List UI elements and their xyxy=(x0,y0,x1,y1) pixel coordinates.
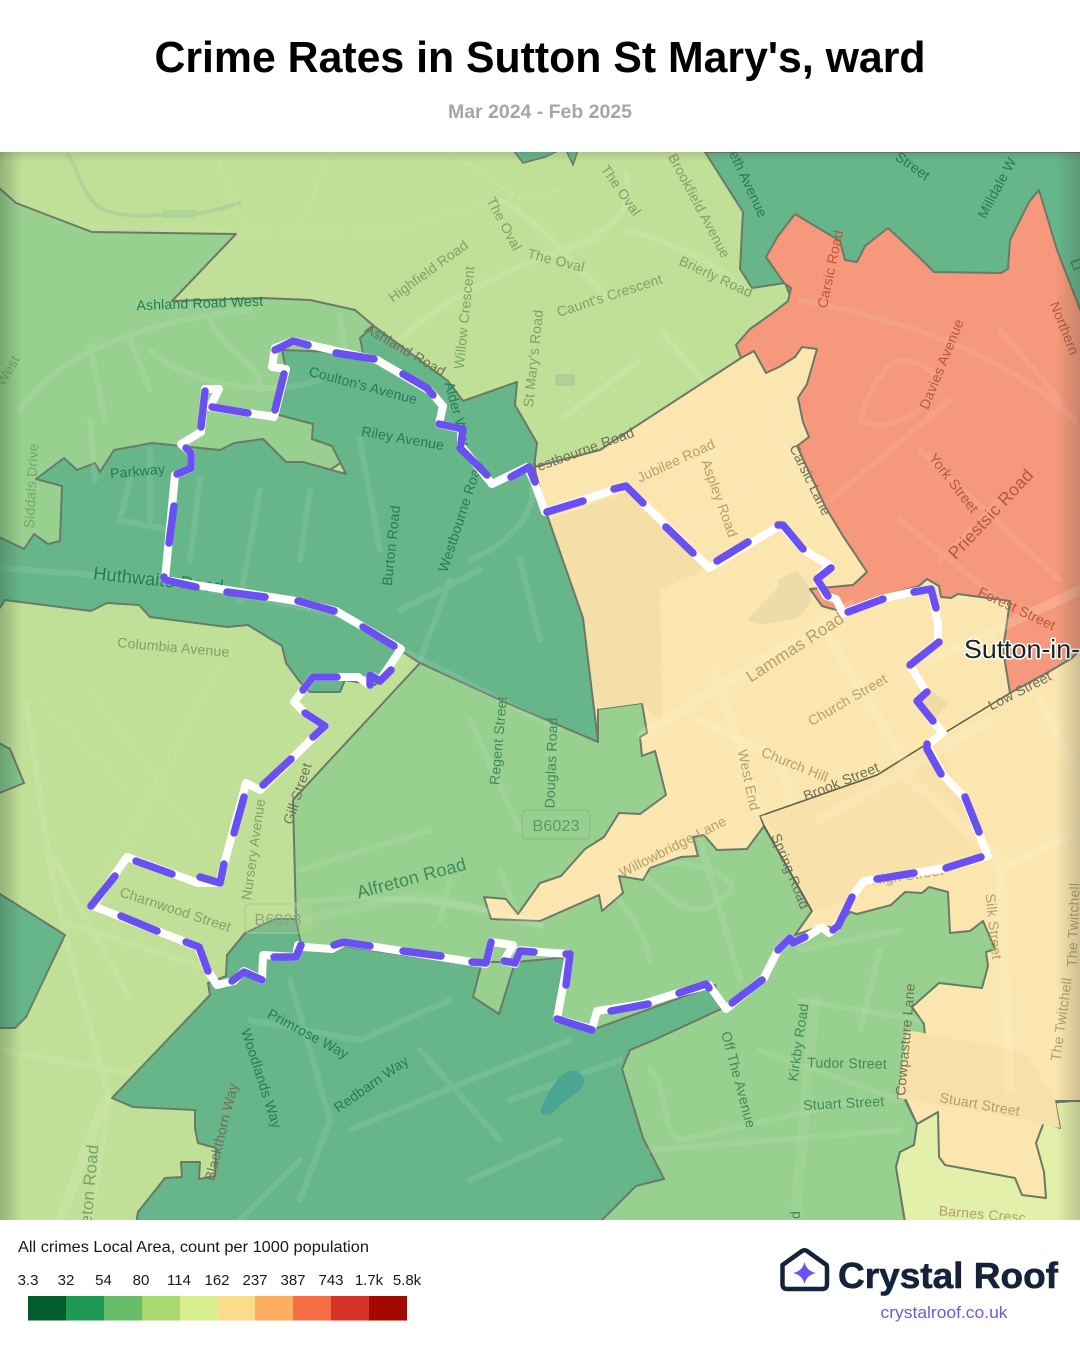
street labels: Burton Road xyxy=(379,504,403,586)
region: dark green top sliver xyxy=(513,150,578,165)
region: mid green central south xyxy=(293,663,1000,1222)
region: mid green west edge xyxy=(0,742,24,794)
legend heading: All crimes Local Area, count per 1000 population xyxy=(18,1239,369,1256)
street labels: Columbia Avenue xyxy=(117,634,230,660)
legend values: 3.3 xyxy=(18,1272,38,1289)
region: salmon high-crime area xyxy=(736,190,1080,693)
legend values: 387 xyxy=(280,1272,306,1289)
road shields xyxy=(245,810,590,933)
region: dark green north xyxy=(705,152,1080,320)
lake xyxy=(540,1071,584,1115)
legend values: 32 xyxy=(58,1272,74,1289)
street labels: Brookfield Avenue xyxy=(665,151,734,261)
street labels: Jubilee Road xyxy=(634,435,717,485)
region: mid green north-west xyxy=(0,186,375,560)
street labels: Woodlands Way xyxy=(238,1027,285,1130)
street labels: Caunt's Crescent xyxy=(555,271,664,320)
place label: Sutton-in-: Sutton-in- xyxy=(964,634,1080,664)
shield: B6023 west: B6023 xyxy=(254,912,302,929)
map edge shading xyxy=(0,152,1080,1220)
street labels: Alder Way xyxy=(442,380,474,448)
legend values: 80 xyxy=(133,1272,149,1289)
street labels: Carsic Lane xyxy=(786,442,835,518)
panel: choropleth map xyxy=(0,148,1080,1226)
street labels: Brook Street xyxy=(801,759,881,804)
street labels: eton Road xyxy=(77,1144,102,1225)
street labels: High Street xyxy=(870,862,944,888)
street labels: Lammas Road xyxy=(743,609,847,686)
street labels: Redbarn Way xyxy=(331,1052,411,1115)
river and top-left paths xyxy=(0,152,745,1220)
road network xyxy=(0,300,1080,1222)
legend values: 237 xyxy=(242,1272,268,1289)
region: pale lime south-east xyxy=(896,1100,1080,1222)
website url: crystalroof.co.uk xyxy=(880,1304,1008,1322)
street labels: Ashland Road xyxy=(362,320,449,379)
street labels: Cowpasture Lane xyxy=(892,983,918,1096)
street labels: d xyxy=(787,1211,803,1219)
region: mid green enclave xyxy=(473,962,515,1014)
legend values: 5.8k xyxy=(393,1272,422,1289)
street labels: Siddals Drive xyxy=(21,443,41,529)
street labels: Ashland Road West xyxy=(136,293,264,313)
street labels: Low Street xyxy=(985,668,1054,713)
street labels: Forest Street xyxy=(976,584,1058,633)
tan darker land-use patches xyxy=(549,492,1060,1128)
small land-use square xyxy=(556,375,574,385)
street labels: The Oval xyxy=(526,245,586,275)
region: dark green central band xyxy=(0,326,598,742)
street labels: York Street xyxy=(926,450,982,516)
street labels: Coulton's Avenue xyxy=(307,363,419,407)
tan interior ward boundary roads xyxy=(760,693,1010,911)
street labels: Willowbridge Lane xyxy=(617,813,729,880)
legend values: 114 xyxy=(167,1272,191,1289)
street labels: Parkway xyxy=(109,461,166,481)
subtitle: date range: Mar 2024 - Feb 2025 xyxy=(448,102,632,123)
street labels: Barnes Cresc xyxy=(938,1202,1027,1226)
title: Crime Rates in Sutton St Mary's, ward xyxy=(154,34,926,82)
street labels: St Mary's Road xyxy=(520,309,546,408)
street labels: Davies Avenue xyxy=(916,317,967,412)
legend values: 743 xyxy=(318,1272,344,1289)
street labels: Aspley Road xyxy=(698,457,741,539)
street labels: Tudor Street xyxy=(807,1054,887,1072)
legend values: 1.7k xyxy=(355,1272,384,1289)
legend xyxy=(18,1239,422,1320)
legend values: 54 xyxy=(95,1272,112,1289)
street labels: eth Avenue xyxy=(726,148,771,220)
legend values xyxy=(18,1272,422,1289)
street labels xyxy=(0,148,1080,1226)
legend values: 162 xyxy=(204,1272,230,1289)
street labels: Westbourne Road xyxy=(435,459,486,574)
street labels: Riley Avenue xyxy=(360,423,446,453)
street labels: Stuart Street xyxy=(803,1093,885,1113)
shield: B6023 east xyxy=(522,810,590,839)
street labels: Stuart Street xyxy=(938,1089,1021,1119)
shield: B6023 west xyxy=(245,904,313,933)
ward boundary: white base line xyxy=(93,341,988,1029)
legend colour scale xyxy=(28,1296,407,1320)
street labels: Milldale W xyxy=(974,154,1020,221)
logo wordmark: Crystal Roof xyxy=(838,1255,1059,1296)
shield: B6023 east: B6023 xyxy=(532,818,580,835)
street labels: Silk Street xyxy=(983,893,1005,960)
street labels: West End xyxy=(735,748,763,812)
street labels: Highfield Road xyxy=(385,237,471,305)
street labels: Regent Street xyxy=(486,696,510,786)
street labels: The Twitchell xyxy=(1047,977,1075,1062)
ward boundary: purple dashes xyxy=(91,341,981,1030)
street labels: Church Street xyxy=(805,670,890,729)
street labels: The Oval xyxy=(484,194,525,253)
street labels: Nursery Avenue xyxy=(238,798,268,901)
street labels: Gill Street xyxy=(280,761,315,826)
street labels: Street xyxy=(892,148,933,184)
region: dark green south xyxy=(112,919,721,1224)
street labels: Brierly Road xyxy=(677,252,755,301)
street labels: Church Hill xyxy=(759,744,831,785)
region: dark green west edge xyxy=(0,892,65,1028)
logo: Crystal Roof xyxy=(782,1250,1059,1322)
street labels: Carsic Road xyxy=(814,229,846,309)
street labels: Priestsic Road xyxy=(944,465,1037,563)
street labels: Charnwood Street xyxy=(118,884,233,935)
street labels: Blackthorn Way xyxy=(201,1081,241,1182)
street labels: Douglas Road xyxy=(541,717,561,809)
street labels: Primrose Way xyxy=(265,1005,352,1062)
street labels: Westbourne Road xyxy=(522,424,636,479)
region: tan town centre xyxy=(484,300,1080,1198)
street labels: The Oval xyxy=(598,162,644,219)
map base: lime area xyxy=(0,152,788,1220)
icon: house with star xyxy=(782,1250,827,1289)
street labels: Off The Avenue xyxy=(718,1030,759,1130)
street labels: Huthwaite Road xyxy=(93,563,225,597)
street labels: Spring Road xyxy=(768,831,813,911)
street labels: Willow Crescent xyxy=(451,265,477,370)
street labels: Kirkby Road xyxy=(785,1002,811,1082)
street labels: Alfreton Road xyxy=(354,854,468,902)
